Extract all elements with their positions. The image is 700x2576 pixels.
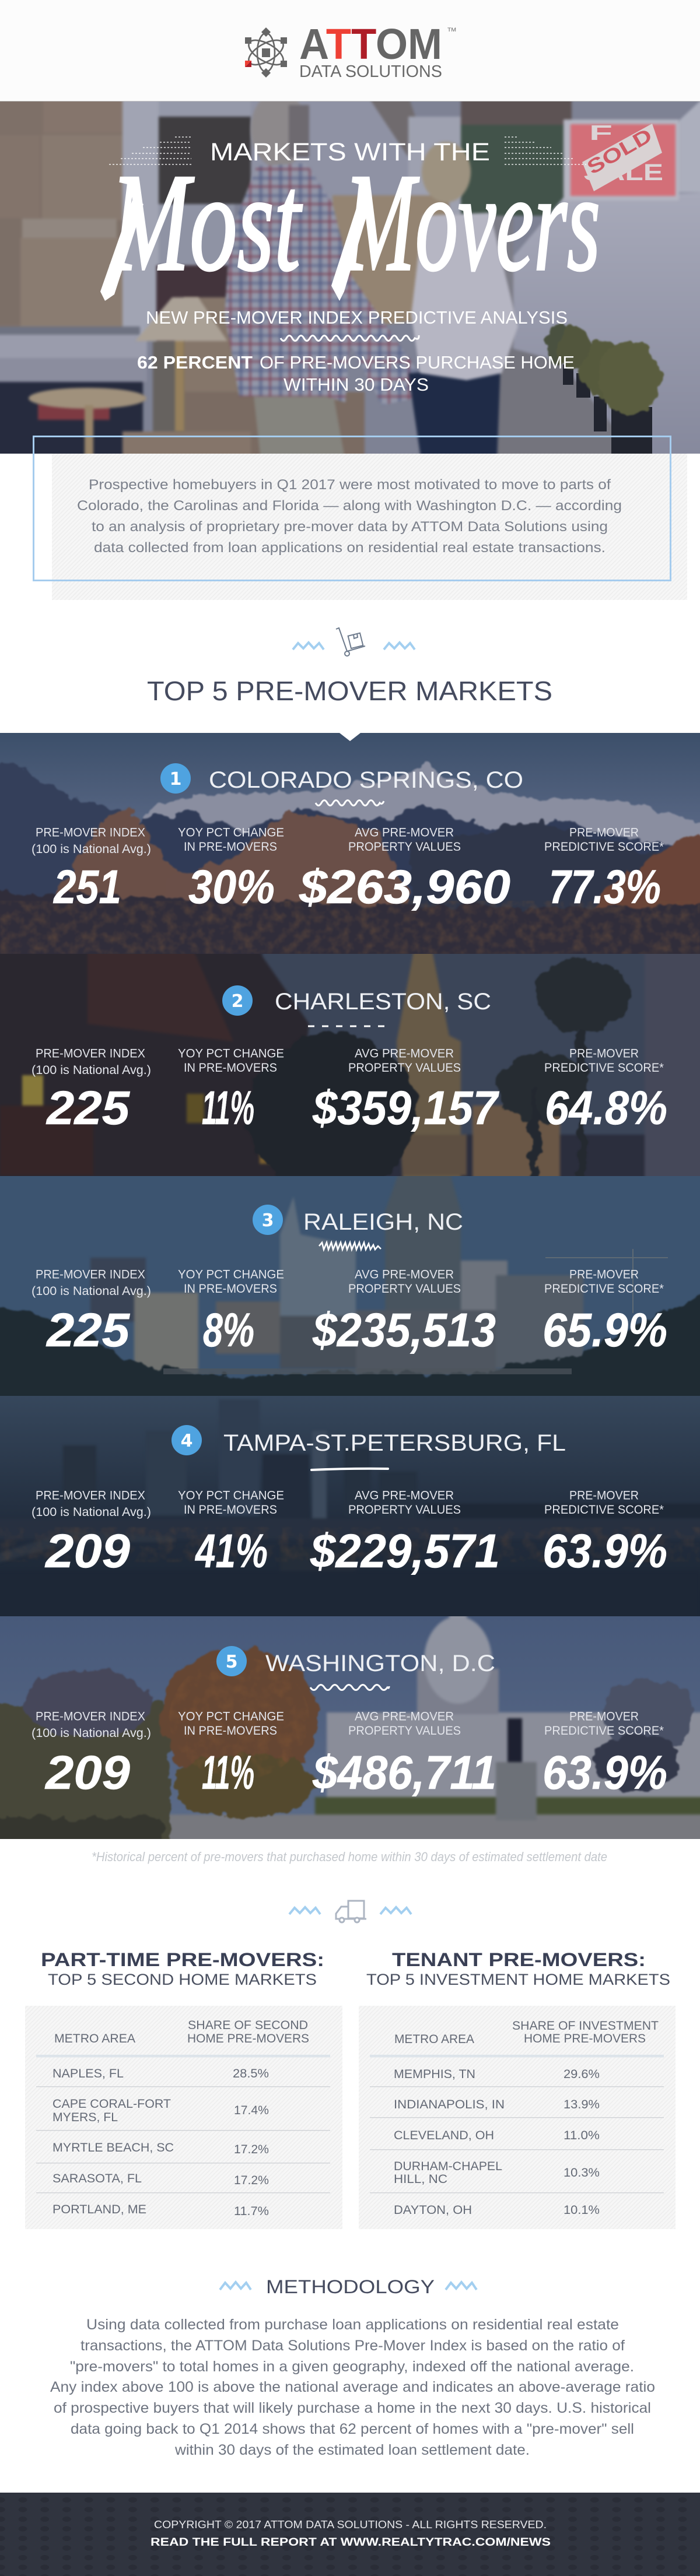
stat labels: (100 is National Avg.) (32, 1064, 151, 1077)
heading: TENANT PRE-MOVERS: (392, 1949, 646, 1970)
stat labels: PREDICTIVE SCORE* (544, 840, 664, 854)
stat labels (32, 1268, 664, 1298)
methodology paragraph: transactions, the ATTOM Data Solutions Pre-Mover Index is based on the ratio of (80, 2338, 625, 2354)
stat labels: YOY PCT CHANGE (178, 1489, 284, 1502)
stat labels: YOY PCT CHANGE (178, 1710, 284, 1724)
dashed divider (308, 1025, 392, 1027)
table: investment home markets: INDIANAPOLIS, IN (394, 2098, 505, 2111)
stat labels: PRE-MOVER (569, 1710, 639, 1724)
stat labels: PROPERTY VALUES (348, 1724, 461, 1738)
methodology paragraph: within 30 days of the estimated loan settlement date. (174, 2442, 530, 2458)
table: investment home markets: HOME PRE-MOVERS (524, 2032, 646, 2045)
stat labels: PRE-MOVER INDEX (36, 1047, 145, 1060)
table: second home markets: 17.4% (234, 2104, 269, 2117)
table: investment home markets: 13.9% (564, 2098, 600, 2111)
notch pointer (340, 733, 360, 741)
stat labels: PROPERTY VALUES (348, 1503, 461, 1517)
market name: WASHINGTON, D.C (265, 1651, 495, 1676)
footer (0, 2493, 700, 2576)
table: investment home markets: DURHAM-CHAPEL (394, 2160, 502, 2173)
stat labels: PROPERTY VALUES (348, 840, 461, 854)
logo tagline: DATA SOLUTIONS (299, 62, 442, 81)
photo: Charleston street and church (0, 954, 700, 1176)
rank badge 3 (253, 1205, 283, 1235)
subheading: new pre-mover index: NEW PRE-MOVER INDEX PREDICTIVE ANALYSIS (146, 307, 568, 328)
stat values: 251 (52, 861, 121, 914)
heading: TOP 5 INVESTMENT HOME MARKETS (366, 1971, 670, 1988)
stat values: 30% (188, 861, 275, 914)
rank badge 3: 3 (262, 1210, 274, 1231)
stat labels: AVG PRE-MOVER (355, 1710, 454, 1724)
hero photo: couple moving boxes: F (589, 121, 612, 145)
stat labels: PREDICTIVE SCORE* (544, 1282, 664, 1296)
icon: moving truck with zigzags (289, 1901, 411, 1922)
table: investment home markets: SHARE OF INVESTMENT (512, 2019, 659, 2033)
stat values (44, 1746, 667, 1799)
heading: TOP 5 SECOND HOME MARKETS (48, 1971, 317, 1988)
decorative dot lines left and right of heading (109, 137, 586, 164)
stat labels: PRE-MOVER INDEX (36, 1489, 145, 1502)
table: investment home markets: 29.6% (564, 2068, 600, 2081)
table: investment home markets: DAYTON, OH (394, 2203, 472, 2217)
methodology paragraph: of prospective buyers that will likely purchase a home in the next 30 days. U.S. historical (54, 2400, 651, 2416)
stat labels: IN PRE-MOVERS (184, 1724, 277, 1738)
line divider (312, 1469, 388, 1470)
stat values: 11% (202, 1082, 254, 1135)
table: investment home markets: METRO AREA (394, 2033, 474, 2046)
intro paragraph: Prospective homebuyers in Q1 2017 were most motivated to move to parts of (89, 477, 611, 493)
trademark: TM (447, 27, 456, 33)
script title: most movers: Most (110, 145, 303, 300)
market name: CHARLESTON, SC (275, 989, 491, 1015)
heading: PART-TIME PRE-MOVERS: (41, 1949, 324, 1970)
rank badge 1 (160, 763, 191, 794)
rank badge 2 (222, 985, 253, 1016)
icon: ATTOM atom logo mark (245, 27, 287, 78)
methodology paragraph: "pre-movers" to total homes in a given geography, indexed off the national average. (70, 2359, 634, 2375)
stat labels: AVG PRE-MOVER (355, 1489, 454, 1502)
stat values: 209 (44, 1746, 130, 1799)
panel: intro text (34, 436, 687, 600)
table: second home markets: NAPLES, FL (52, 2067, 124, 2080)
stat values: 77.3% (549, 861, 661, 914)
table: second home markets: 17.2% (234, 2143, 269, 2156)
stat labels (32, 1489, 664, 1519)
stat values: 209 (44, 1525, 130, 1578)
panel: market 4 Tampa (0, 1396, 700, 1623)
stat labels (32, 1710, 664, 1740)
photo: mountains and red rocks (0, 733, 700, 954)
stat values (46, 1082, 667, 1135)
stat labels: PRE-MOVER INDEX (36, 826, 145, 840)
panel: market 2 Charleston (0, 948, 700, 1196)
stat values: 41% (194, 1525, 268, 1578)
stat labels: IN PRE-MOVERS (184, 840, 277, 854)
hero photo: couple moving boxes: SOLD (583, 124, 656, 179)
hero photo: couple moving boxes: SALE (583, 160, 663, 185)
stat values: $486,711 (312, 1746, 496, 1799)
table: second home markets: CAPE CORAL-FORT (52, 2097, 171, 2111)
panel: market 5 Washington (0, 1610, 700, 1847)
copyright: COPYRIGHT © 2017 ATTOM DATA SOLUTIONS - ALL RIGHTS RESERVED. (154, 2519, 547, 2531)
table: investment home markets: MEMPHIS, TN (394, 2068, 475, 2081)
stat values (46, 1304, 667, 1357)
table: second home markets: 17.2% (234, 2174, 269, 2187)
methodology paragraph: Any index above 100 is above the national average and indicates an above-average ratio (50, 2379, 655, 2395)
market name: RALEIGH, NC (303, 1209, 463, 1235)
stat labels: PRE-MOVER (569, 1047, 639, 1060)
stat labels: PROPERTY VALUES (348, 1282, 461, 1296)
stat labels: PREDICTIVE SCORE* (544, 1503, 664, 1517)
rank badge 5: 5 (226, 1652, 237, 1672)
table: second home markets: METRO AREA (54, 2032, 135, 2045)
heading: markets with the: MARKETS WITH THE (210, 138, 490, 166)
stat labels: PREDICTIVE SCORE* (544, 1724, 664, 1738)
stat values: $229,571 (310, 1525, 500, 1578)
stat labels: IN PRE-MOVERS (184, 1061, 277, 1075)
stat values: 11% (202, 1746, 254, 1799)
hero photo: couple moving boxes (0, 101, 700, 454)
squiggle (316, 800, 384, 806)
squiggle (310, 1685, 389, 1690)
intro paragraph: Colorado, the Carolinas and Florida — along with Washington D.C. — according (77, 498, 622, 514)
stat values (52, 861, 661, 914)
table: second home markets: PORTLAND, ME (52, 2203, 146, 2216)
methodology paragraph: Using data collected from purchase loan applications on residential real estate (86, 2317, 619, 2333)
stat labels: PRE-MOVER (569, 826, 639, 840)
footnote: *Historical percent of pre-movers that purchased home within 30 days of estimated settlement date (92, 1849, 607, 1864)
methodology paragraph (50, 2317, 655, 2458)
statistic: 62 percent (137, 352, 575, 395)
stat labels: (100 is National Avg.) (32, 1726, 151, 1740)
table: second home markets: 28.5% (233, 2067, 269, 2080)
table: investment home markets: CLEVELAND, OH (394, 2129, 494, 2142)
panel: market 3 Raleigh (0, 1170, 700, 1409)
stat labels: PRE-MOVER (569, 1489, 639, 1502)
stat labels: (100 is National Avg.) (32, 843, 151, 856)
stat values: 63.9% (542, 1746, 667, 1799)
stat labels: YOY PCT CHANGE (178, 1268, 284, 1282)
table: investment home markets: 10.3% (564, 2166, 600, 2180)
script title: most movers (100, 145, 600, 301)
stat values: $359,157 (312, 1082, 499, 1135)
panel: part-time pre-movers (25, 1949, 342, 2229)
methodology heading with zigzags (220, 2276, 477, 2297)
stat labels: PROPERTY VALUES (348, 1061, 461, 1075)
table: second home markets: SHARE OF SECOND (188, 2019, 308, 2032)
methodology paragraph: data going back to Q1 2014 shows that 62 percent of homes with a "pre-mover" sell (71, 2421, 634, 2437)
photo: Raleigh skyline (0, 1176, 700, 1396)
stat labels: PRE-MOVER (569, 1268, 639, 1282)
stat labels: PREDICTIVE SCORE* (544, 1061, 664, 1075)
report link: READ THE FULL REPORT AT WWW.REALTYTRAC.COM/NEWS (150, 2536, 551, 2549)
stat values: 225 (46, 1304, 130, 1357)
rank badge 5 (216, 1646, 247, 1676)
stat labels: YOY PCT CHANGE (178, 1047, 284, 1060)
rank badge 2: 2 (232, 991, 243, 1012)
stat labels: PRE-MOVER INDEX (36, 1710, 145, 1724)
photo: Tampa skyline at dusk (0, 1396, 700, 1616)
rank badge 4 (172, 1425, 202, 1455)
heading: top 5 pre-mover markets: TOP 5 PRE-MOVER MARKETS (147, 676, 552, 706)
intro paragraph: data collected from loan applications on residential real estate transactions. (94, 540, 606, 556)
stat values: 63.9% (542, 1525, 667, 1578)
stat labels (32, 1047, 664, 1077)
market name: COLORADO SPRINGS, CO (209, 767, 523, 793)
panel: methodology (50, 2276, 655, 2458)
heading (366, 1949, 670, 1988)
photo: US Capitol with autumn trees (0, 1616, 700, 1839)
stat values: 8% (203, 1304, 254, 1357)
table: investment home markets: 11.0% (564, 2129, 600, 2142)
intro paragraph (77, 477, 622, 556)
table: investment home markets: 10.1% (564, 2203, 600, 2217)
heading (41, 1949, 324, 1988)
stat values: $235,513 (312, 1304, 496, 1357)
header with logo (0, 0, 700, 101)
table: investment home markets: HILL, NC (394, 2173, 447, 2186)
stat labels (32, 826, 664, 856)
statistic: 62 percent: WITHIN 30 DAYS (284, 374, 429, 395)
table: investment home markets (359, 2006, 676, 2229)
statistic: 62 percent: 62 PERCENT (137, 352, 253, 373)
methodology heading with zigzags: METHODOLOGY (266, 2276, 435, 2297)
stat labels: (100 is National Avg.) (32, 1505, 151, 1519)
panel: hero (0, 91, 700, 462)
table: second home markets (25, 2006, 342, 2229)
stat labels: (100 is National Avg.) (32, 1285, 151, 1298)
stat values (44, 1525, 667, 1578)
rank badge 4: 4 (181, 1431, 192, 1451)
stat labels: IN PRE-MOVERS (184, 1282, 277, 1296)
statistic: 62 percent: OF PRE-MOVERS PURCHASE HOME (260, 352, 575, 373)
icon: hand truck with zigzags (293, 628, 415, 656)
stat labels: AVG PRE-MOVER (355, 1268, 454, 1282)
panel: tenant pre-movers (359, 1949, 676, 2229)
stat values: 64.8% (545, 1082, 667, 1135)
market name: TAMPA-ST.PETERSBURG, FL (223, 1430, 566, 1456)
squiggle divider (281, 335, 419, 341)
logo wordmark: ATTOM (299, 20, 442, 68)
stat labels: IN PRE-MOVERS (184, 1503, 277, 1517)
table: second home markets: MYRTLE BEACH, SC (52, 2141, 174, 2154)
stat labels: AVG PRE-MOVER (355, 1047, 454, 1060)
panel: market 1 Colorado Springs (0, 733, 700, 968)
table: second home markets: 11.7% (234, 2205, 269, 2218)
table: second home markets: SARASOTA, FL (52, 2172, 142, 2185)
zigzag divider (319, 1243, 381, 1250)
stat labels: YOY PCT CHANGE (178, 826, 284, 840)
rank badge 1: 1 (170, 769, 181, 789)
intro paragraph: to an analysis of proprietary pre-mover data by ATTOM Data Solutions using (92, 519, 608, 535)
stat labels: PRE-MOVER INDEX (36, 1268, 145, 1282)
table: second home markets: HOME PRE-MOVERS (187, 2032, 309, 2045)
stat values: 65.9% (542, 1304, 667, 1357)
stat values: $263,960 (299, 861, 510, 914)
table: second home markets: MYERS, FL (52, 2111, 118, 2124)
stat values: 225 (46, 1082, 130, 1135)
stat labels: AVG PRE-MOVER (355, 826, 454, 840)
